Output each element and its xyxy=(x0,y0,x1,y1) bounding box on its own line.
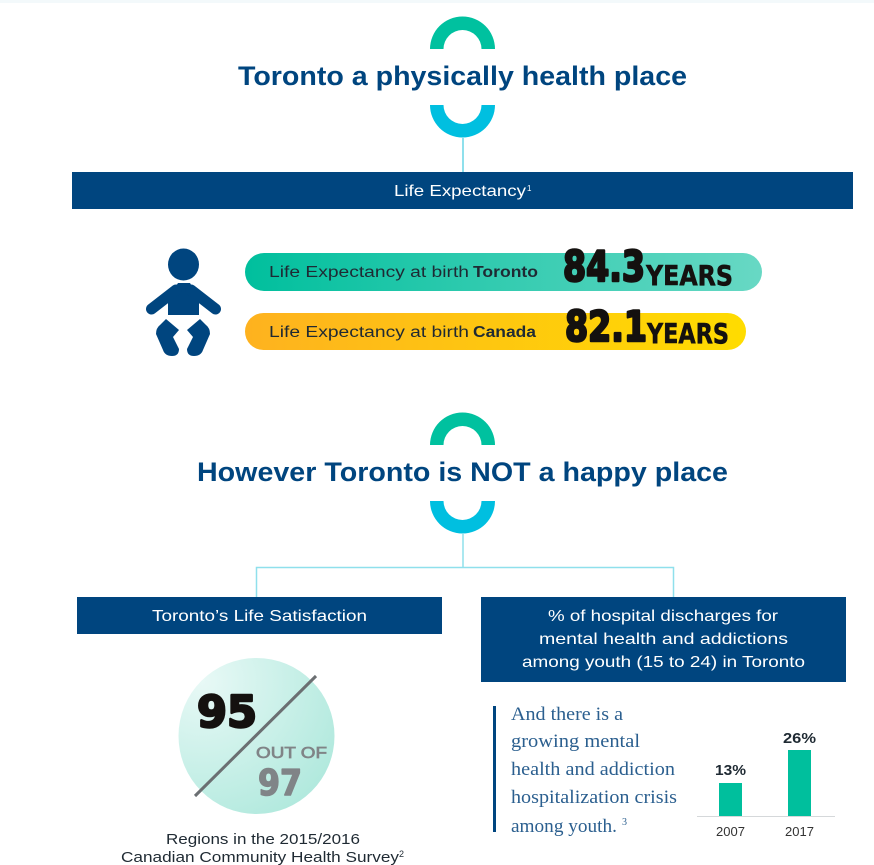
graphic: 95 out of 97 circle: OUT OF xyxy=(256,745,327,762)
band: hospital discharges: mental health and addictions xyxy=(539,631,788,648)
bar: 2007: 2007 xyxy=(716,824,745,839)
icon: baby xyxy=(152,248,216,356)
bar chart: discharges 2007 vs 2017 xyxy=(697,730,835,839)
title: physically healthy: Toronto a physically health place xyxy=(238,61,687,91)
callout: growing crisis quote: growing mental xyxy=(511,731,640,752)
value: 82.1 years: 82.1 xyxy=(565,302,647,351)
pill: Canada life expectancy: Canada xyxy=(473,324,536,341)
icon: top green arc xyxy=(430,412,495,445)
caption: survey regions xyxy=(121,831,404,865)
band: hospital discharges xyxy=(481,597,846,682)
value: 84.3 years xyxy=(563,242,733,292)
bar: 2007 xyxy=(715,762,746,839)
callout: growing crisis quote: 3 xyxy=(622,817,627,828)
value: 84.3 years: YEARS xyxy=(645,259,733,292)
caption: survey regions: Regions in the 2015/2016 xyxy=(166,831,360,848)
title: not happy: However Toronto is NOT a happy place xyxy=(197,457,728,487)
callout: growing crisis quote: hospitalization crisis xyxy=(511,787,677,808)
graphic: 95 out of 97 circle: 95 xyxy=(197,687,257,738)
bar: 2017: 26% xyxy=(783,730,816,747)
connector: heading to two panels xyxy=(256,534,674,597)
band: Life Expectancy: Life Expectancy xyxy=(394,183,526,200)
connector: heading to life expectancy band xyxy=(462,138,464,172)
bar: 2017 xyxy=(783,730,816,839)
caption: survey regions: 2 xyxy=(399,849,404,859)
pill: Canada life expectancy: Life Expectancy at birth xyxy=(269,324,469,341)
bar: 2007: 13% xyxy=(715,762,746,779)
pill: Toronto life expectancy: Life Expectancy at birth xyxy=(269,264,469,281)
icon: bottom blue arc xyxy=(430,105,495,138)
pill: Toronto life expectancy: Toronto xyxy=(473,264,538,281)
band: Life Expectancy xyxy=(72,172,853,209)
heading group: However Toronto is NOT a happy place xyxy=(197,412,728,534)
band: Toronto's Life Satisfaction: Toronto’s Life Satisfaction xyxy=(152,608,367,625)
bar: 2017: 2017 xyxy=(785,824,814,839)
value: 84.3 years: 84.3 xyxy=(563,242,645,291)
band: Life Expectancy: 1 xyxy=(527,184,532,193)
value: 82.1 years: YEARS xyxy=(646,317,729,350)
value: 82.1 years xyxy=(565,302,729,351)
callout: growing crisis quote: among youth. xyxy=(511,816,617,837)
graphic: 95 out of 97 circle: 97 xyxy=(258,763,302,804)
callout: growing crisis quote: health and addiction xyxy=(511,759,676,780)
callout: growing crisis quote xyxy=(493,704,677,837)
callout: growing crisis quote: And there is a xyxy=(511,704,624,725)
graphic: 95 out of 97 circle xyxy=(178,658,334,814)
band: hospital discharges: % of hospital discharges for xyxy=(548,608,779,625)
icon: top green arc xyxy=(430,16,495,49)
heading group: Toronto a physically health place xyxy=(238,16,687,138)
icon: bottom blue arc xyxy=(430,501,495,534)
band: Toronto's Life Satisfaction xyxy=(77,597,442,634)
pill: Canada life expectancy xyxy=(245,302,746,351)
pill: Toronto life expectancy xyxy=(245,242,762,292)
band: hospital discharges: among youth (15 to 24) in Toronto xyxy=(522,654,805,671)
